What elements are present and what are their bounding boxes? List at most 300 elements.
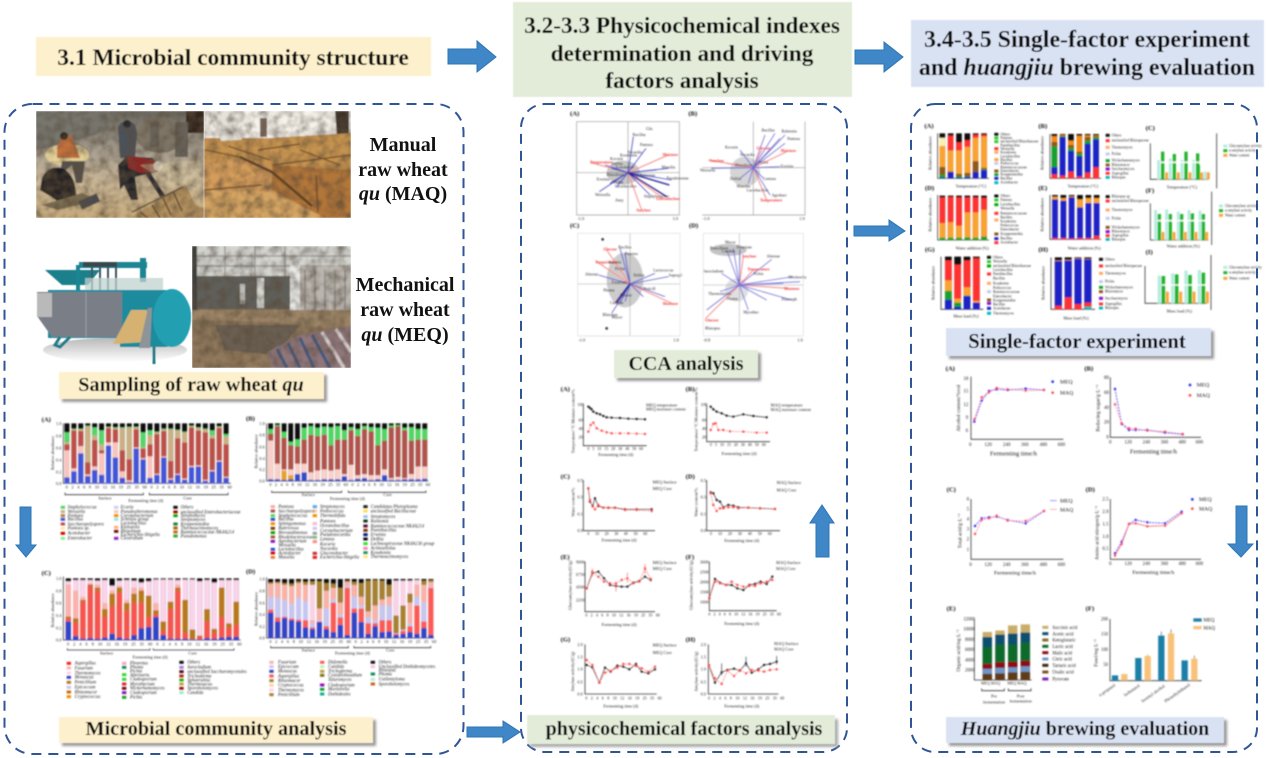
- line chart A: temperature: Fermenting time (d): [598, 452, 634, 457]
- chart A: bacteria surface and core: Streptomyces: [181, 518, 206, 523]
- chart E: addition stacks: Pichia: [1112, 216, 1121, 220]
- chart B: temperature stacks: Rhizopus: [1112, 175, 1126, 179]
- line chart C: total acid: 600: [1058, 563, 1066, 568]
- chart B: bacteria alternate sample: Escherichia-Shigella: [319, 556, 360, 561]
- CCA plot B: Pichia: [758, 159, 769, 164]
- chart G: moisture stacks: Bacillus: [993, 302, 1006, 306]
- chart F: enzyme and water bars: (F): [1146, 188, 1154, 195]
- stacked bar chart E: organic acids: 6000: [965, 648, 975, 653]
- grouped bar chart F: fusel alcohols: Fusel/mg·L⁻¹: [1094, 639, 1100, 667]
- chart E: addition stacks: Rhizomucor: [1112, 230, 1131, 234]
- chart D: addition stacks: Pediococcus: [1000, 223, 1019, 227]
- line chart G: amylase: 1.0: [577, 667, 583, 672]
- line chart B: temperature: Temperature/ °C Moisture content/%: [693, 387, 698, 452]
- photo: manual qu bricks: [204, 111, 351, 218]
- chart D: fungi alternate sample: [246, 568, 436, 698]
- chart C: fungi surface and core: (C): [42, 570, 51, 577]
- line chart B: reducing sugar: (B): [1084, 366, 1093, 373]
- chart H: moisture stacks: [1038, 246, 1142, 320]
- heading: single-factor experiment: [946, 328, 1214, 359]
- chart B: bacteria alternate sample: Fermenting time (d): [330, 496, 365, 501]
- line chart F: glucoamylase: 2500: [700, 569, 709, 574]
- label: manual raw wheat qu: qu (MAQ): [359, 183, 447, 205]
- chart D: addition stacks: Ruminococcaceae: [1000, 211, 1027, 215]
- chart A: temperature stacks: Pediococcus: [1000, 162, 1019, 166]
- chart A: bacteria surface and core: unclassified Enterobacteriaceae: [181, 510, 241, 515]
- chart A: bacteria surface and core: Core: [183, 495, 192, 500]
- line chart D: water content: 0.5: [701, 478, 706, 483]
- line chart C: water content: 0.1: [577, 511, 583, 516]
- chart I: enzyme and water bars: Water content: [1229, 276, 1249, 280]
- line chart A: alcohol content: 12: [963, 403, 969, 408]
- chart F: enzyme and water bars: [1146, 188, 1258, 248]
- stacked bar chart E: organic acids: 8000: [965, 638, 975, 643]
- chart D: fungi alternate sample: Fermenting time (d): [335, 650, 370, 655]
- chart B: temperature stacks: Others: [1112, 133, 1122, 137]
- CCA plot D: Candida: [722, 249, 735, 254]
- chart B: bacteria alternate sample: unclassified Bacillaceae: [371, 509, 416, 514]
- line chart C: total acid: 6: [967, 498, 970, 503]
- CCA plot B: Erwinia: [781, 163, 794, 168]
- stacked bar chart E: organic acids: 2000: [965, 668, 975, 673]
- chart A: temperature stacks: unclassified Rhizobiaceae: [1000, 140, 1039, 144]
- CCA plot D: Moisture: [784, 286, 800, 291]
- line chart C: total acid: 0: [969, 563, 972, 568]
- chart C: fungi surface and core: Fusarium: [74, 666, 93, 671]
- CCA plot D: Alternar: [767, 253, 781, 258]
- line chart B: temperature: 40: [702, 426, 706, 431]
- line chart C: total acid: 240: [1003, 563, 1011, 568]
- CCA plot A: Weissella: [595, 192, 610, 197]
- CCA plot B: (B): [688, 110, 697, 117]
- title: 3.2-3.3 physicochemical indexes: 3.2-3.3 Physicochemical indexes: [524, 13, 840, 39]
- stacked bar chart E: organic acids: Pre: [991, 694, 997, 699]
- line chart A: alcohol content: 480: [1040, 443, 1048, 448]
- line chart C: total acid: 480: [1040, 563, 1048, 568]
- line chart A: alcohol content: MEQ: [1060, 379, 1073, 385]
- CCA plot B: Kocuria: [725, 145, 738, 150]
- CCA plot A: Pichia: [613, 179, 624, 184]
- chart C: enzyme and water bars: (C): [1146, 125, 1155, 132]
- chart B: bacteria alternate sample: Saccharopolyspora: [278, 509, 315, 514]
- CCA plot A: Temperature: [590, 159, 612, 164]
- chart B: temperature stacks: Wickerhamomyces: [1112, 159, 1140, 163]
- grouped bar chart F: fusel alcohols: 200: [1101, 618, 1109, 623]
- line chart D: amino acid nitrogen: 120: [1124, 562, 1132, 567]
- chart G: moisture stacks: Kroppenstedtia: [993, 298, 1016, 302]
- chart A: temperature stacks: [924, 123, 1039, 188]
- chart B: bacteria alternate sample: Rubrivivax: [277, 527, 300, 532]
- CCA plot D: Mortierella: [788, 274, 806, 279]
- chart C: enzyme and water bars: Temperature (°C): [1167, 184, 1198, 189]
- CCA plot D: Myrothec: [743, 309, 759, 314]
- chart D: fungi alternate sample: Others: [379, 661, 392, 666]
- chart G: moisture stacks: Others: [993, 255, 1003, 259]
- chart B: temperature stacks: Thermomyces: [1112, 145, 1133, 149]
- line chart C: total acid: 1: [967, 548, 970, 553]
- title: 3.1 microbial community structure: [36, 37, 431, 76]
- chart A: bacteria surface and core: Kroppenstedtia: [180, 522, 210, 527]
- chart H: moisture stacks: (H): [1038, 246, 1048, 253]
- chart A: bacteria surface and core: Ecoria: [120, 506, 134, 511]
- CCA plot A: Kocuria: [610, 156, 623, 161]
- line chart B: temperature: Fermenting time (d): [722, 451, 757, 456]
- line chart H: amylase: 0.5: [701, 679, 706, 684]
- photo: manual qu workers: [36, 111, 204, 218]
- chart A: bacteria surface and core: 1.0: [56, 421, 61, 426]
- chart C: fungi surface and core: Thermoascus: [187, 682, 212, 687]
- CCA plot D: Rhizopus: [705, 325, 721, 330]
- line chart E: glucoamylase: 2250: [576, 597, 585, 602]
- line chart F: glucoamylase: MAQ Core: [776, 566, 796, 571]
- line chart E: glucoamylase: [561, 554, 677, 627]
- chart D: fungi alternate sample: Phoma: [378, 672, 393, 677]
- chart B: bacteria alternate sample: Staphylococcus: [278, 514, 307, 519]
- arrow: middle panel to right panel: [854, 220, 905, 241]
- line chart C: total acid: 5: [967, 508, 970, 513]
- line chart B: reducing sugar: 600: [1196, 440, 1204, 445]
- chart E: addition stacks: Water addition (%): [1068, 245, 1101, 250]
- chart C: fungi surface and core: Surface: [100, 650, 113, 655]
- chart B: bacteria alternate sample: Bacillus: [278, 518, 294, 523]
- CCA plot B: Ralstonia: [782, 129, 797, 134]
- title: 3.2-3.3 physicochemical indexes: [513, 2, 852, 97]
- CCA plot B: Weissella: [700, 168, 715, 173]
- chart C: enzyme and water bars: Water content: [1229, 153, 1249, 157]
- stacked bar chart E: organic acids: Citric acid: [1052, 658, 1073, 663]
- chart G: moisture stacks: Acetobacter: [993, 307, 1011, 311]
- chart B: bacteria alternate sample: Ruminococcaceae NK4A214: [370, 524, 425, 529]
- CCA plot B: Pantoea: [787, 136, 800, 141]
- label: mechanical raw wheat qu: raw wheat: [360, 299, 450, 321]
- line chart H: amylase: 1.0: [701, 667, 706, 672]
- line chart B: reducing sugar: Reducing sugar/g·L⁻¹: [1095, 384, 1101, 432]
- line chart C: total acid: Total acid/g·L⁻¹: [958, 513, 964, 548]
- stacked bar chart E: organic acids: Organic acid/mg·L⁻¹: [956, 629, 962, 672]
- chart I: enzyme and water bars: α-amylase activity: [1229, 271, 1256, 275]
- chart A: bacteria surface and core: Klebsiella: [120, 526, 140, 531]
- line chart B: reducing sugar: 480: [1178, 440, 1186, 445]
- chart A: temperature stacks: Ruminococcaceae: [1000, 165, 1027, 169]
- heading: physicochemical factors analysis: physicochemical factors analysis: [546, 718, 823, 740]
- line chart A: alcohol content: MAQ: [1060, 390, 1073, 396]
- chart H: moisture stacks: Saccharomyces: [1105, 296, 1128, 300]
- title: 3.2-3.3 physicochemical indexes: determination and driving: [551, 41, 814, 67]
- chart G: moisture stacks: Kosakonia: [993, 281, 1009, 285]
- CCA plot C: Phoma: [603, 288, 615, 293]
- stacked bar chart E: organic acids: 4000: [965, 658, 975, 663]
- line chart H: amylase: MAQ Core: [774, 647, 794, 652]
- label: manual raw wheat qu: Manual: [370, 134, 437, 156]
- heading: physicochemical factors analysis: [527, 715, 838, 747]
- chart G: moisture stacks: Ruminococcaceae: [993, 290, 1020, 294]
- line chart B: reducing sugar: 40: [1104, 406, 1109, 411]
- chart A: bacteria surface and core: Saccharopolyspora: [68, 522, 104, 527]
- CCA plot B: Massilia: [737, 183, 750, 188]
- label: mechanical raw wheat qu: Mechanical: [356, 274, 455, 296]
- CCA plot A: Staphylococcus: [644, 193, 669, 198]
- line chart D: water content: MAQ Core: [777, 488, 796, 493]
- line chart H: amylase: 1.5: [701, 654, 706, 659]
- line chart C: water content: Fermenting time (d): [602, 538, 637, 543]
- chart G: moisture stacks: Relative abundance: [930, 266, 935, 300]
- line chart G: amylase: Amylase activity/(U/g): [570, 651, 575, 692]
- photo: mechanical qu machine: [37, 258, 191, 364]
- chart B: bacteria alternate sample: 0.4: [259, 456, 266, 461]
- line chart G: amylase: 1.5: [577, 654, 583, 659]
- line chart B: temperature: 20: [702, 434, 706, 439]
- stacked bar chart E: organic acids: 12000: [963, 618, 976, 623]
- chart C: fungi surface and core: Relative abundance: [50, 593, 55, 627]
- CCA plot B: -1.0: [703, 216, 710, 221]
- chart D: fungi alternate sample: Candida: [328, 665, 345, 670]
- line chart C: water content: (C): [561, 473, 570, 480]
- chart D: fungi alternate sample: Monascus: [277, 670, 297, 675]
- chart H: moisture stacks: unclassified Rhizopaceae: [1105, 264, 1142, 268]
- stacked bar chart E: organic acids: MEQ MAQ: [981, 680, 1000, 685]
- line chart D: amino acid nitrogen: 360: [1161, 562, 1169, 567]
- title: 3.2-3.3 physicochemical indexes: factors analysis: [605, 68, 759, 94]
- CCA plot D: Fusarium: [737, 244, 753, 249]
- line chart F: glucoamylase: Fermenting time (d): [724, 621, 760, 626]
- label: manual raw wheat qu: [358, 134, 448, 205]
- line chart C: total acid: 120: [984, 563, 992, 568]
- chart C: fungi surface and core: Rhizomucor: [74, 690, 97, 695]
- chart D: fungi alternate sample: 0 2 4 6 8 10 12 16 19 25 35 60 0 2 4 6 8 10 12 16 19 25 35 60: [269, 639, 436, 644]
- chart C: fungi surface and core: [42, 570, 247, 701]
- line chart H: amylase: 2.0: [701, 642, 706, 647]
- physicochemical line charts: [561, 386, 812, 708]
- chart B: bacteria alternate sample: Agrobacterium: [277, 540, 307, 545]
- stacked bar chart E: organic acids: Ketoglutaric: [1052, 639, 1076, 644]
- line chart E: glucoamylase: 6750: [576, 572, 585, 577]
- line chart A: alcohol content: 600: [1058, 443, 1066, 448]
- chart A: bacteria surface and core: 0.6: [56, 446, 62, 451]
- chart B: bacteria alternate sample: Corynebacterium: [320, 529, 353, 534]
- chart B: temperature stacks: (B): [1038, 123, 1047, 130]
- line chart B: temperature: MAQ moisture content: [771, 407, 812, 412]
- chart B: bacteria alternate sample: Kocuria: [319, 542, 336, 547]
- chart D: addition stacks: Others: [1000, 194, 1011, 198]
- line chart A: temperature: MEQ temperature: [646, 402, 677, 407]
- line chart B: temperature: (B): [686, 386, 695, 393]
- chart C: fungi surface and core: Cladosporium: [130, 691, 157, 696]
- CCA plot B: Nocardia: [740, 152, 755, 157]
- chart A: bacteria surface and core: Enterobacter: [67, 537, 92, 542]
- line chart D: amino acid nitrogen: 240: [1143, 562, 1151, 567]
- line chart E: glucoamylase: (E): [561, 554, 570, 561]
- line chart D: water content: 0.1: [701, 511, 706, 516]
- chart B: bacteria alternate sample: 0.8: [259, 433, 265, 438]
- CCA plot D: Pichia: [753, 271, 764, 276]
- CCA plot A: Amy: [615, 198, 624, 203]
- CCA plot A: Kosakonia: [620, 153, 637, 158]
- line chart E: glucoamylase: 4500: [576, 585, 585, 590]
- line chart B: reducing sugar: 20: [1104, 421, 1109, 426]
- line chart D: water content: Fermenting time (d): [724, 538, 760, 543]
- chart C: fungi surface and core: 0.0: [56, 638, 61, 643]
- chart C: fungi surface and core: Thermomyces: [75, 671, 101, 676]
- grouped bar chart F: fusel alcohols: Isoamyl alcohol: [1140, 683, 1166, 703]
- grouped bar chart F: fusel alcohols: [1086, 606, 1215, 703]
- stacked bar chart E: organic acids: Acetic acid: [1052, 632, 1074, 637]
- chart A: bacteria surface and core: Bacillus: [68, 518, 83, 523]
- grouped bar chart F: fusel alcohols: MAQ: [1203, 626, 1215, 631]
- CCA plot D: Penicillium: [710, 245, 729, 250]
- stacked bar chart E: organic acids: Tartaric acid: [1052, 664, 1076, 669]
- chart D: fungi alternate sample: Epicoccum: [277, 665, 299, 670]
- chart H: moisture stacks: Relative abundance: [1040, 266, 1045, 300]
- chart H: moisture stacks: Thermomyces: [1105, 271, 1126, 275]
- chart B: bacteria alternate sample: Streptomyces: [320, 505, 345, 510]
- CCA plot C: Mucor: [612, 314, 623, 319]
- CCA plot B: 1.0: [799, 216, 805, 221]
- chart B: bacteria alternate sample: Relative abundance: [253, 434, 258, 468]
- CCA plot B: Moisture: [781, 148, 796, 153]
- chart A: bacteria surface and core: Pseudoalteromonas: [120, 510, 158, 515]
- line chart A: temperature: MEQ moisture content: [646, 407, 686, 412]
- chart B: bacteria alternate sample: Pantoea: [319, 520, 336, 525]
- CCA plot A: Erwinia: [597, 177, 610, 182]
- line chart H: amylase: Amylase activity/(U/g): [693, 651, 698, 692]
- chart A: temperature stacks: Temperature (°C): [956, 183, 987, 188]
- chart B: bacteria alternate sample: Thermoactinomyces: [371, 555, 408, 560]
- panel: microbial community: [4, 104, 464, 754]
- line chart C: total acid: Fermenting time/h: [994, 570, 1036, 576]
- chart C: fungi surface and core: 0.2: [56, 625, 61, 630]
- chart G: moisture stacks: Weissella: [993, 260, 1007, 264]
- chart B: bacteria alternate sample: Delftia: [370, 537, 384, 542]
- arrow: 3.1 to 3.2: [448, 41, 496, 72]
- line chart D: amino acid nitrogen: (D): [1086, 487, 1095, 494]
- line chart E: glucoamylase: 9000: [576, 559, 585, 564]
- chart C: fungi surface and core: Candida: [187, 691, 204, 696]
- chart C: fungi surface and core: Sporobolomyces: [187, 687, 218, 692]
- chart H: moisture stacks: Others: [1105, 257, 1115, 261]
- chart A: temperature stacks: (A): [924, 123, 934, 130]
- chart A: temperature stacks: Lactobacillus: [1000, 154, 1021, 158]
- panel: single-factor and brewing: [911, 104, 1257, 752]
- chart A: bacteria surface and core: Ruminococcaceae NK4A214: [180, 530, 235, 535]
- chart B: temperature stacks: Aspergillus: [1112, 171, 1129, 175]
- chart E: addition stacks: Aspergillus: [1112, 234, 1129, 238]
- chart C: fungi surface and core: Epicoccum: [74, 686, 96, 691]
- heading: single-factor experiment: Single-factor experiment: [968, 331, 1186, 353]
- chart G: moisture stacks: Pediococcus: [993, 286, 1012, 290]
- stacked bar chart E: organic acids: MEQ MAQ: [1007, 680, 1027, 685]
- line chart F: glucoamylase: 0 2 4 6 8 10 12 16 19 25 35 60: [708, 611, 781, 616]
- chart E: addition stacks: [1038, 185, 1149, 250]
- CCA plot D: (D): [689, 222, 698, 229]
- line chart A: alcohol content: 120: [984, 443, 992, 448]
- CCA ordination plots: [570, 110, 806, 343]
- CCA plot A: Glucoamylase: [656, 196, 680, 201]
- chart H: moisture stacks: Rhizomucor: [1105, 290, 1124, 294]
- chart C: fungi surface and core: 0.4: [56, 613, 62, 618]
- arrow: down in right panel: [1228, 506, 1253, 557]
- line chart C: water content: MEQ Core: [653, 486, 672, 491]
- chart C: fungi surface and core: Wickerhamomyces: [130, 687, 165, 692]
- chart A: temperature stacks: Bacillus: [1000, 176, 1013, 180]
- label: mechanical raw wheat qu: [356, 274, 455, 346]
- CCA plot A: Pseudomonas: [667, 175, 689, 180]
- line chart G: amylase: 2.0: [577, 642, 583, 647]
- chart E: addition stacks: (E): [1038, 185, 1047, 192]
- heading: CCA analysis: [614, 350, 761, 381]
- chart C: fungi surface and core: Others: [187, 661, 200, 666]
- heading: sampling of raw wheat qu: Sampling of raw wheat qu: [78, 374, 304, 396]
- heading: sampling of raw wheat qu: [59, 372, 327, 402]
- line chart B: reducing sugar: 240: [1143, 440, 1151, 445]
- line chart B: temperature: MAQ temperature: [771, 403, 803, 408]
- chart B: bacteria alternate sample: Erwinia: [370, 533, 386, 538]
- CCA plot A: Pantoea: [640, 142, 653, 147]
- chart H: moisture stacks: Rhizopus: [1105, 306, 1119, 310]
- chart A: temperature stacks: Bacillus: [1000, 158, 1013, 162]
- chart D: addition stacks: [925, 185, 1027, 250]
- CCA plot C: (C): [570, 222, 579, 229]
- line chart C: total acid: [947, 487, 1073, 576]
- chart A: temperature stacks: Kroppenstedtia: [1000, 173, 1023, 177]
- chart C: fungi surface and core: Pleurotus: [129, 662, 148, 667]
- CCA plot C: Candida: [610, 300, 624, 305]
- line chart D: water content: 0.3: [701, 495, 706, 500]
- chart B: temperature stacks: unclassified Rhizopaceae: [1112, 139, 1149, 143]
- line chart A: alcohol content: 0: [969, 443, 972, 448]
- chart D: fungi alternate sample: 0.0: [259, 636, 265, 641]
- chart I: enzyme and water bars: [1145, 249, 1262, 314]
- CCA plot C: Glucose: [603, 247, 617, 252]
- line chart F: glucoamylase: 2000: [700, 579, 709, 584]
- line chart A: temperature: Temperature/ °C Moisture content/%: [570, 389, 575, 453]
- chart A: bacteria surface and core: (A): [42, 416, 51, 423]
- stacked bar chart E: organic acids: Malic acid: [1052, 651, 1073, 656]
- CCA plot C: 1.0: [673, 338, 679, 343]
- CCA plot B: Glucose: [757, 145, 770, 150]
- line chart D: amino acid nitrogen: [1086, 487, 1212, 576]
- chart A: bacteria surface and core: Pseudomonas: [180, 534, 207, 539]
- line chart D: amino acid nitrogen: 1.0: [1102, 535, 1109, 540]
- chart E: addition stacks: Rhizopus: [1112, 237, 1126, 241]
- photo: mechanical qu warehouse: [192, 246, 351, 368]
- chart B: temperature stacks: Pichia: [1112, 152, 1121, 156]
- chart B: bacteria alternate sample: Actinoallolus: [370, 547, 396, 552]
- CCA plot D: Mucor: [725, 239, 736, 244]
- CCA plot A: Amylase: [636, 208, 651, 213]
- chart A: bacteria surface and core: Others: [181, 506, 194, 511]
- line chart E: glucoamylase: Glucoamylase activity/(U/g): [568, 560, 573, 610]
- line chart G: amylase: 0.0: [577, 692, 583, 697]
- chart G: moisture stacks: Lactobacillus: [993, 268, 1013, 272]
- chart C: fungi surface and core: 1.0: [56, 576, 61, 581]
- chart D: fungi alternate sample: Thermomyces: [278, 688, 304, 693]
- chart D: fungi alternate sample: Relative abundance: [253, 592, 258, 626]
- chart D: fungi alternate sample: 0.6: [259, 600, 266, 605]
- line chart H: amylase: [686, 637, 798, 708]
- CCA plot D: -0.8: [703, 338, 710, 343]
- grouped bar chart F: fusel alcohols: 100: [1101, 648, 1109, 653]
- line chart G: amylase: MEQ Core: [653, 650, 672, 655]
- chart A: bacteria surface and core: 0.4: [56, 458, 62, 463]
- chart A: bacteria surface and core: Surface: [98, 495, 112, 500]
- chart B: bacteria alternate sample: Candidatus Phytoplasma: [371, 505, 418, 510]
- brewing evaluation charts: [946, 366, 1215, 704]
- chart B: temperature stacks: Relative abundance: [1039, 136, 1044, 170]
- chart B: bacteria alternate sample: Lachnospiraceae NK4A136 group: [370, 542, 435, 547]
- CCA plot A: [570, 110, 689, 221]
- chart A: bacteria surface and core: Corynebacterium: [121, 514, 154, 519]
- chart A: bacteria surface and core: 0.8: [56, 433, 61, 438]
